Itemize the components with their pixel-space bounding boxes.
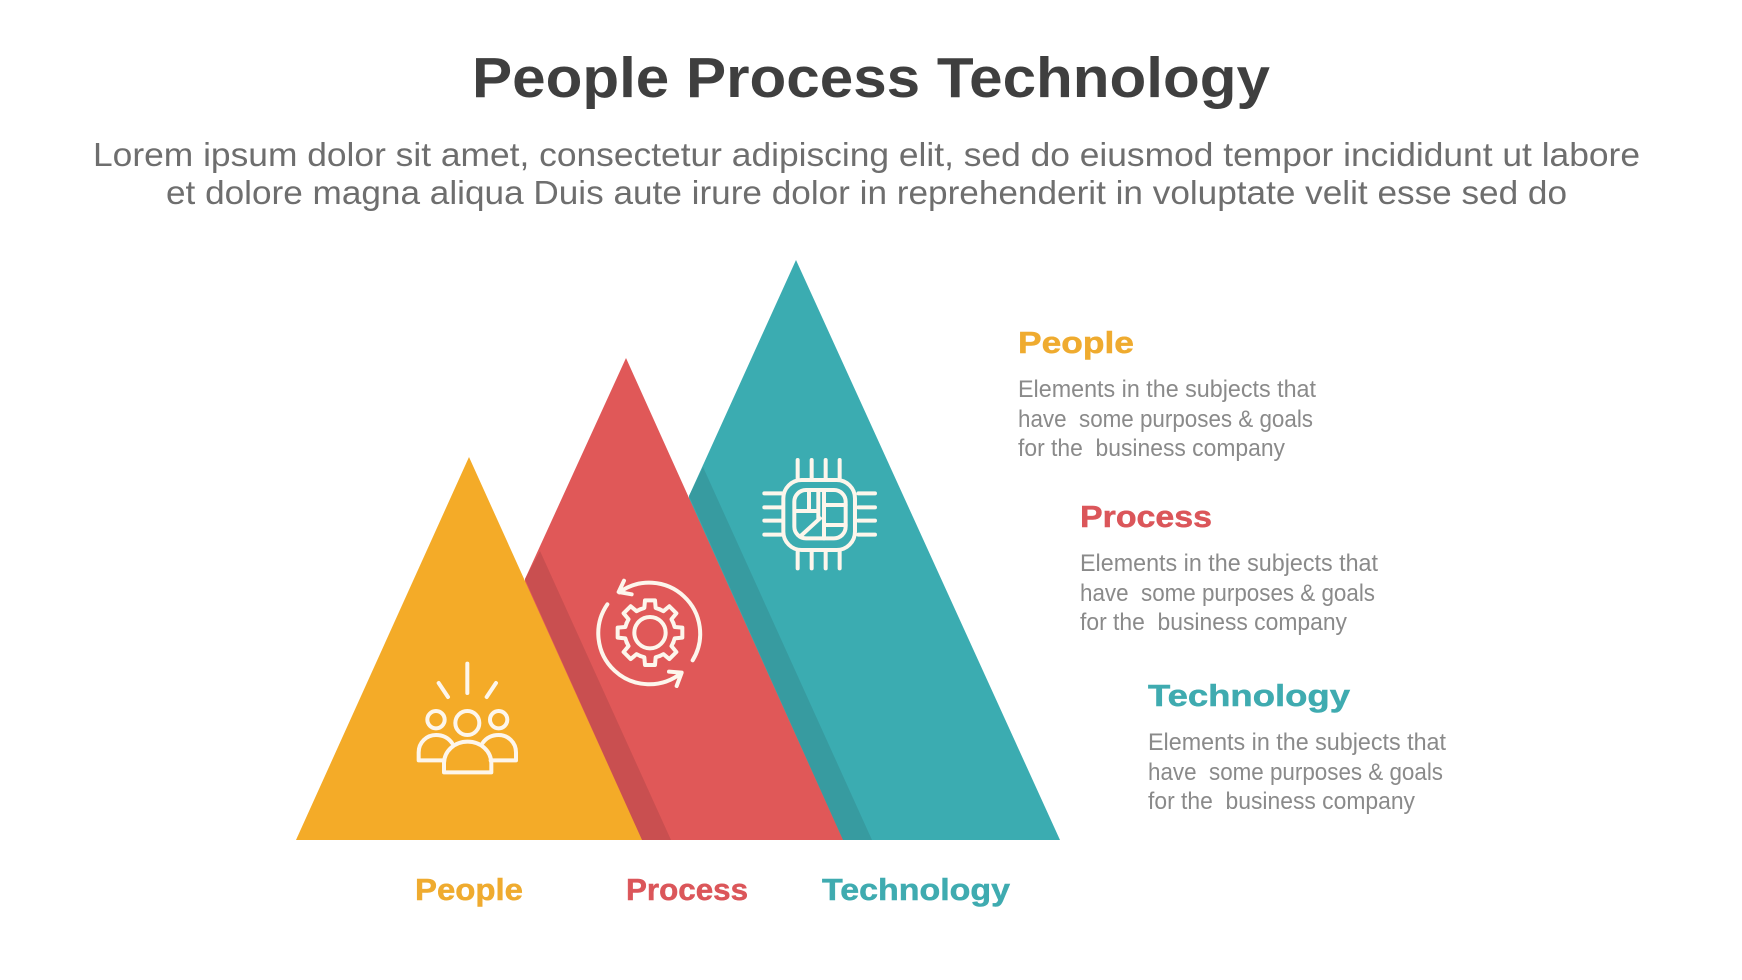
text block: process: Process <box>1080 499 1212 534</box>
title: People Process Technology <box>472 46 1270 110</box>
text block: technology <box>1148 678 1446 815</box>
subtitle text block <box>93 136 1640 211</box>
triangle: process <box>525 358 843 840</box>
icon: chip <box>764 460 875 568</box>
text block: technology: Technology <box>1148 678 1351 713</box>
text block: process: have some purposes & goals <box>1080 580 1375 607</box>
text block: people <box>1018 325 1316 462</box>
triangle chart <box>296 260 1060 840</box>
text block: technology: have some purposes & goals <box>1148 759 1443 786</box>
subtitle text block: et dolore magna aliqua Duis aute irure dolor in reprehenderit in voluptate velit esse sed do <box>166 174 1567 211</box>
text block: people: People <box>1018 325 1134 360</box>
icon: people group <box>419 664 516 772</box>
triangle: technology <box>689 260 1060 840</box>
label: process (bottom): Process <box>626 872 748 907</box>
text block: people: have some purposes & goals <box>1018 406 1313 433</box>
label: technology (bottom): Technology <box>822 872 1011 907</box>
text block: technology: Elements in the subjects that <box>1148 729 1446 756</box>
text block: people: for the business company <box>1018 435 1285 462</box>
triangle: people <box>296 457 642 840</box>
subtitle text block: Lorem ipsum dolor sit amet, consectetur adipiscing elit, sed do eiusmod tempor incididunt ut labore <box>93 136 1640 173</box>
label: people (bottom): People <box>415 872 523 907</box>
text block: people: Elements in the subjects that <box>1018 376 1316 403</box>
text block: process: for the business company <box>1080 609 1347 636</box>
icon: gear with rotating arrows <box>598 581 700 686</box>
text block: technology: for the business company <box>1148 788 1415 815</box>
shadow on process triangle <box>525 551 671 840</box>
shadow on technology triangle <box>689 467 872 840</box>
text block: process <box>1080 499 1378 636</box>
text block: process: Elements in the subjects that <box>1080 550 1378 577</box>
